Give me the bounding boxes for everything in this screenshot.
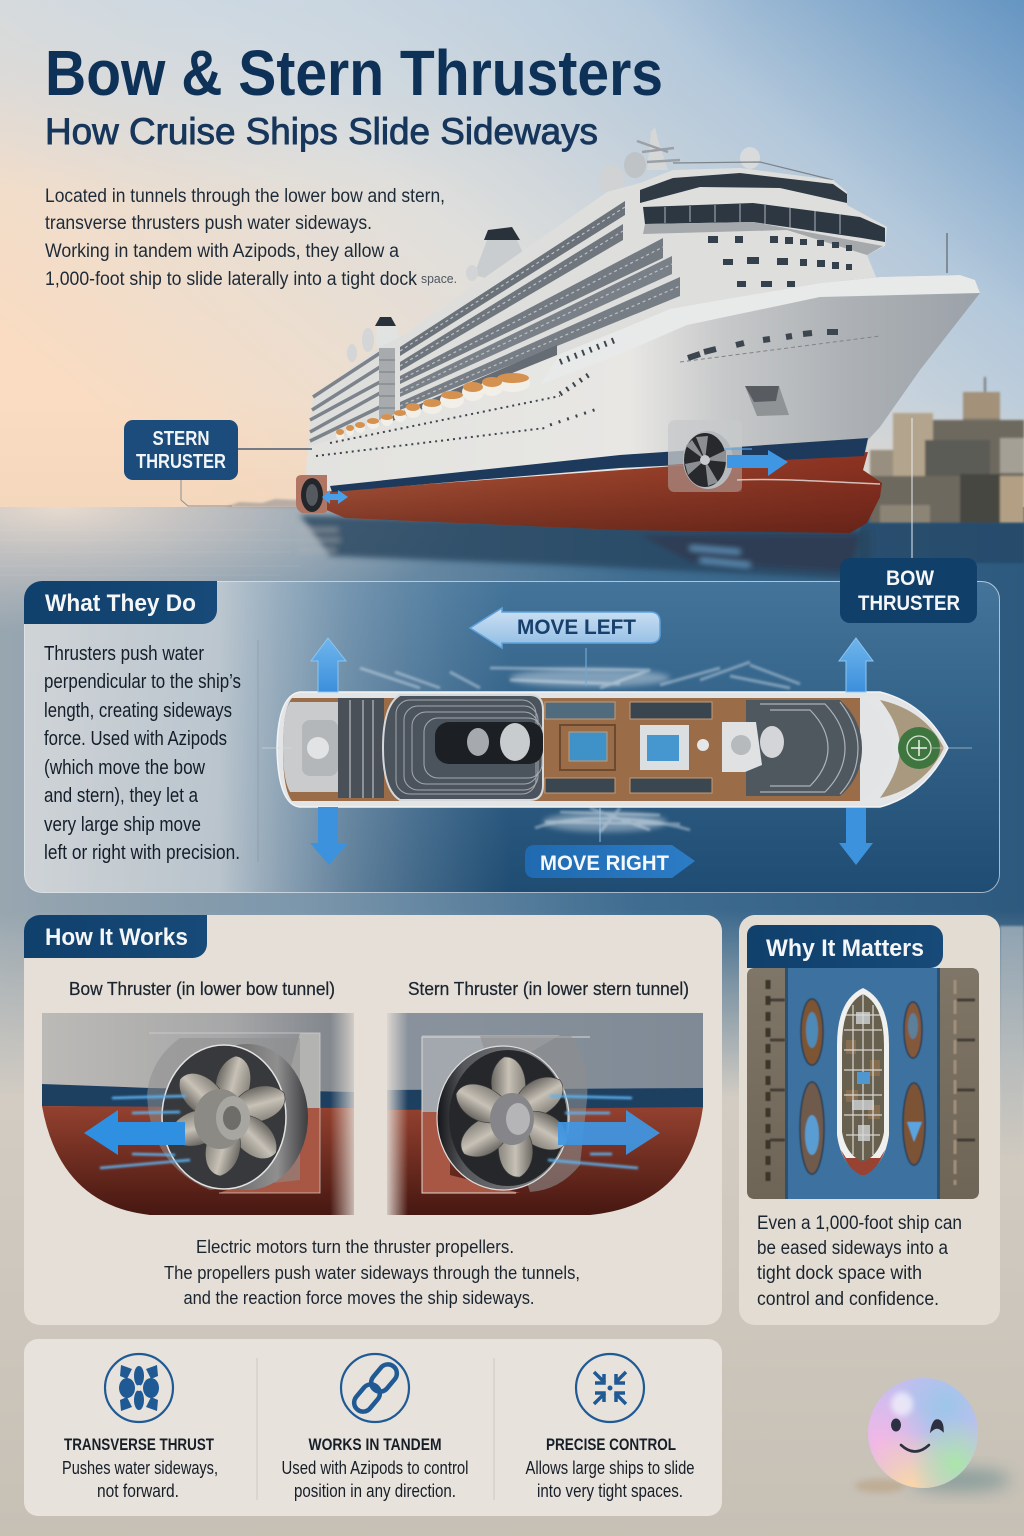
- bow thruster caption: Bow Thruster (in lower bow tunnel): [69, 978, 335, 999]
- sea background: [0, 507, 1024, 1107]
- why it matters text: control and confidence.: [757, 1289, 939, 1310]
- stern block: [283, 702, 345, 792]
- bow flare highlight: [540, 275, 980, 385]
- intro text: 1,000-foot ship to slide laterally into a tight dock: [45, 269, 417, 290]
- stern thruster illustration: [384, 1010, 703, 1218]
- intro text: Working in tandem with Azipods, they allow a: [45, 241, 399, 262]
- funnels: [347, 227, 527, 362]
- cruise ship side view: [296, 127, 980, 580]
- benefit: works in tandem: Used with Azipods to control: [282, 1458, 468, 1478]
- intro text: space.: [421, 271, 457, 286]
- blue waterline stripe: [330, 438, 868, 492]
- what they do text: perpendicular to the ship’s: [44, 671, 241, 693]
- why it matters text: tight dock space with: [757, 1263, 922, 1284]
- sky background: [0, 0, 1024, 525]
- stern thruster caption: Stern Thruster (in lower stern tunnel): [408, 978, 689, 999]
- docked small ships: [800, 999, 925, 1174]
- thrust arrow: bow down: [839, 808, 873, 865]
- stern thruster on hull: [296, 475, 348, 513]
- dockside buildings: [870, 377, 1024, 523]
- benefit: works in tandem: position in any direction.: [294, 1481, 456, 1501]
- benefit: transverse thrust: Pushes water sideways,: [62, 1458, 218, 1478]
- bow thruster on hull: [668, 420, 880, 492]
- water foam: [360, 662, 800, 832]
- why it matters text: be eased sideways into a: [757, 1238, 948, 1259]
- forward decks: [746, 700, 862, 796]
- mast and radar domes: [599, 127, 947, 273]
- smiling orb mascot: [855, 1378, 1010, 1493]
- superstructure: [308, 168, 887, 447]
- bridge windows: [640, 173, 885, 255]
- what they do text: Thrusters push water: [44, 643, 204, 665]
- benefit: precise control: PRECISE CONTROL: [546, 1435, 676, 1454]
- thrust arrow: stern up: [311, 638, 346, 692]
- why it matters text: [757, 1213, 962, 1310]
- central ship: [837, 988, 889, 1176]
- move left arrow: [470, 608, 660, 648]
- bow thruster illustration: [42, 1010, 360, 1218]
- heading tab: what they do: [24, 581, 217, 624]
- intro text: Located in tunnels through the lower bow and stern,: [45, 186, 445, 207]
- stern thruster callout: [124, 420, 312, 506]
- harbor water by dock: [860, 523, 1024, 563]
- why it matters text: Even a 1,000-foot ship can: [757, 1213, 962, 1234]
- what they do text: length, creating sideways: [44, 700, 232, 722]
- what they do text: force. Used with Azipods: [44, 728, 227, 750]
- intro text: transverse thrusters push water sideways.: [45, 213, 372, 234]
- subtitle: How Cruise Ships Slide Sideways: [45, 111, 598, 152]
- glass deck: [383, 695, 543, 800]
- intro text: [45, 186, 457, 290]
- icon: precise control: [576, 1354, 644, 1422]
- thrust arrow: stern down: [310, 807, 348, 865]
- move right arrow: [525, 845, 695, 878]
- heading tab: how it works: [24, 915, 207, 958]
- stern thruster callout: THRUSTER: [136, 451, 226, 473]
- lifeboats: [336, 373, 530, 440]
- benefit: precise control: Allows large ships to slide: [526, 1458, 694, 1478]
- panel: why it matters: [739, 915, 1000, 1325]
- bow thruster callout: [840, 418, 977, 623]
- helipad: [898, 727, 940, 769]
- hull white: [306, 275, 980, 498]
- benefit: precise control: [526, 1435, 694, 1501]
- heading tab: what they do: What They Do: [45, 590, 196, 617]
- what they do text: (which move the bow: [44, 757, 205, 779]
- how it works text: and the reaction force moves the ship sideways.: [184, 1288, 534, 1308]
- hull vent: [745, 386, 789, 416]
- benefit: transverse thrust: TRANSVERSE THRUST: [64, 1435, 214, 1454]
- panel: how it works: [24, 915, 722, 1325]
- benefit: transverse thrust: [62, 1435, 218, 1501]
- icon: works in tandem: [341, 1354, 409, 1422]
- move left arrow: MOVE LEFT: [517, 616, 636, 639]
- panel: key benefits: [24, 1339, 722, 1516]
- move right arrow: MOVE RIGHT: [540, 852, 669, 875]
- thrust arrow: bow up: [839, 638, 873, 692]
- deck bands: [310, 201, 680, 441]
- heading tab: how it works: How It Works: [45, 924, 188, 951]
- lower page background: [0, 910, 1024, 1536]
- benefit: works in tandem: [282, 1435, 468, 1501]
- heading tab: why it matters: Why It Matters: [766, 935, 924, 962]
- benefit: precise control: into very tight spaces.: [537, 1481, 683, 1501]
- how it works text: The propellers push water sideways through the tunnels,: [164, 1263, 580, 1283]
- what they do text: very large ship move: [44, 814, 201, 836]
- panel: what they do: [24, 581, 1000, 893]
- heading tab: why it matters: [747, 925, 943, 968]
- what they do text: and stern), they let a: [44, 785, 199, 807]
- ship reflection in water: [298, 515, 870, 580]
- harbor overhead illustration: [747, 968, 979, 1199]
- bow thruster callout: BOW: [886, 567, 934, 590]
- benefit: works in tandem: WORKS IN TANDEM: [308, 1435, 442, 1454]
- bow deck: [860, 696, 945, 803]
- red hull: [320, 452, 882, 533]
- what they do text: [44, 643, 241, 864]
- distant shoreline: [225, 499, 300, 508]
- bow thruster callout: THRUSTER: [858, 592, 960, 615]
- how it works text: Electric motors turn the thruster propellers.: [196, 1237, 514, 1257]
- how it works text: [164, 1237, 580, 1308]
- title: Bow & Stern Thrusters: [45, 37, 663, 109]
- icon: transverse thrust: [105, 1354, 173, 1422]
- hull windows: [316, 332, 880, 456]
- central pools and decks: [545, 702, 712, 793]
- benefit: transverse thrust: not forward.: [97, 1481, 179, 1501]
- stern thruster callout: STERN: [152, 428, 210, 450]
- what they do text: left or right with precision.: [44, 842, 240, 864]
- top view ship: [262, 692, 972, 807]
- bridge block windows: [708, 236, 852, 287]
